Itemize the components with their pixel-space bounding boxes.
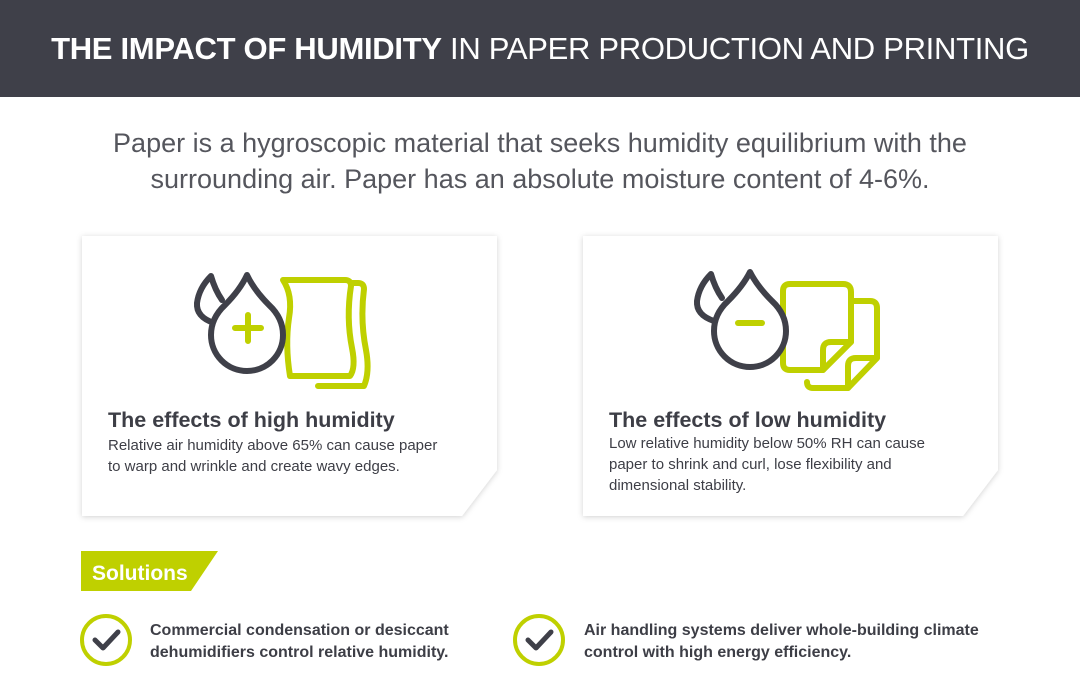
solution 2 text: control with high energy efficiency. (584, 644, 851, 661)
icon: check 2 (515, 616, 563, 664)
solution 2 text (584, 622, 979, 661)
solution 1 text: Commercial condensation or desiccant (150, 622, 449, 639)
icon: drops with minus and folded paper (697, 272, 877, 388)
intro text: Paper is a hygroscopic material that seeks humidity equilibrium with the (113, 128, 967, 158)
icon: check 1 (82, 616, 130, 664)
text: low humidity (609, 435, 925, 494)
solution 2 text: Air handling systems deliver whole-building climate (584, 622, 979, 639)
title: THE IMPACT OF HUMIDITY IN PAPER PRODUCTION AND PRINTING (51, 31, 1029, 66)
text: high humidity: to warp and wrinkle and create wavy edges. (108, 458, 400, 475)
intro text: surrounding air. Paper has an absolute moisture content of 4-6%. (151, 164, 929, 194)
panel: low humidity card (583, 236, 998, 516)
icon: drops with plus and wavy paper (197, 275, 368, 386)
solution 1 text (150, 622, 449, 661)
text: low humidity: dimensional stability. (609, 477, 746, 494)
title (0, 0, 1080, 97)
heading: low humidity: The effects of low humidity (609, 408, 886, 432)
panel: high humidity card (82, 236, 497, 516)
text: low humidity: paper to shrink and curl, lose flexibility and (609, 456, 892, 473)
solutions label (81, 551, 218, 591)
intro text (113, 128, 967, 194)
solutions label: Solutions (92, 562, 188, 585)
heading: high humidity: The effects of high humidity (108, 408, 395, 432)
text: high humidity (108, 437, 438, 475)
solution 1 text: dehumidifiers control relative humidity. (150, 644, 448, 661)
text: low humidity: Low relative humidity below 50% RH can cause (609, 435, 925, 452)
text: high humidity: Relative air humidity above 65% can cause paper (108, 437, 437, 454)
